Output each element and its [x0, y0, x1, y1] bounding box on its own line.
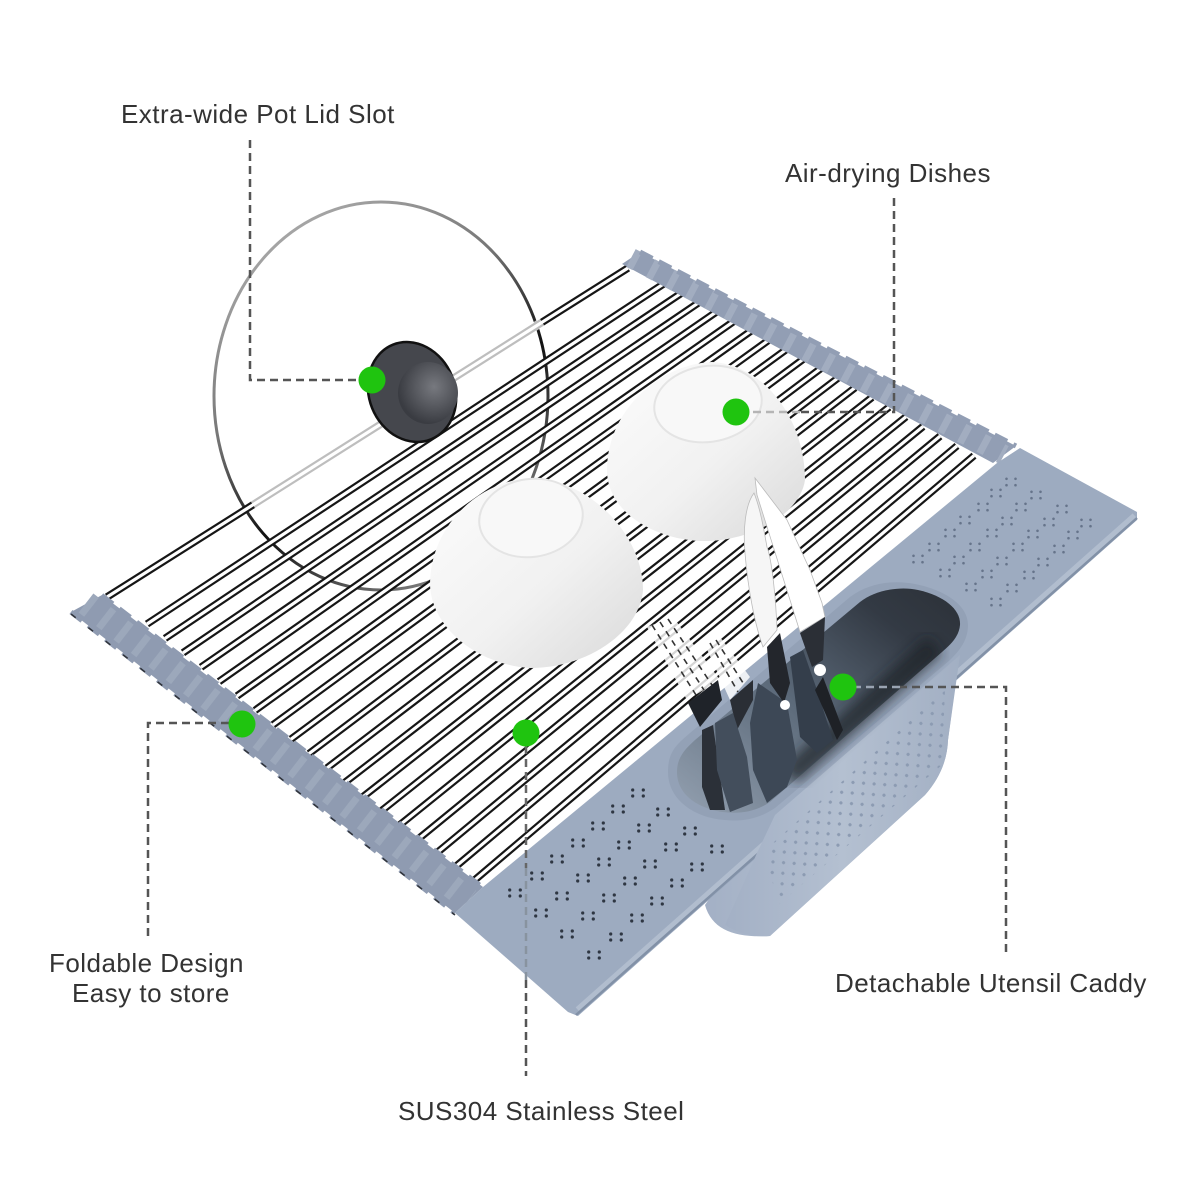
label: easy to store: Easy to store: [72, 978, 230, 1008]
label: utensil caddy: Detachable Utensil Caddy: [835, 968, 1147, 998]
green marker dots: [228, 366, 856, 746]
panel: caddy opening: [668, 582, 968, 820]
label: pot lid slot: Extra-wide Pot Lid Slot: [121, 99, 395, 129]
icon: pot lid knob: [353, 329, 471, 455]
icon: pot lid glass rim: [214, 202, 548, 590]
perforations: left tray area: [508, 788, 724, 960]
icon: back bowl: [607, 359, 805, 541]
label: air drying: Air-drying Dishes: [785, 158, 991, 188]
dashed leader: foldable: [148, 723, 242, 936]
dashed leader: caddy: [843, 687, 1006, 952]
dashed leader: dishes: [736, 198, 894, 412]
panel: caddy front wall with perforations: [725, 655, 960, 936]
label: stainless steel: SUS304 Stainless Steel: [398, 1096, 684, 1126]
panel: perforated drain tray: [455, 448, 1137, 1016]
dashed leader: pot lid: [250, 140, 372, 380]
label: foldable design: Foldable Design: [49, 948, 244, 978]
perforations: right tray area: [912, 478, 1092, 606]
icon: knives: [744, 478, 843, 803]
panel: stainless steel rods: [107, 268, 974, 883]
icon: forks: [647, 617, 753, 812]
dashed leader: stainless steel: [525, 733, 527, 1076]
panel: left folding silicone strip: [71, 595, 483, 915]
icon: front bowl: [430, 472, 643, 668]
panel: back folding silicone strip: [622, 252, 1016, 463]
panel: caddy basket body: [705, 680, 956, 936]
